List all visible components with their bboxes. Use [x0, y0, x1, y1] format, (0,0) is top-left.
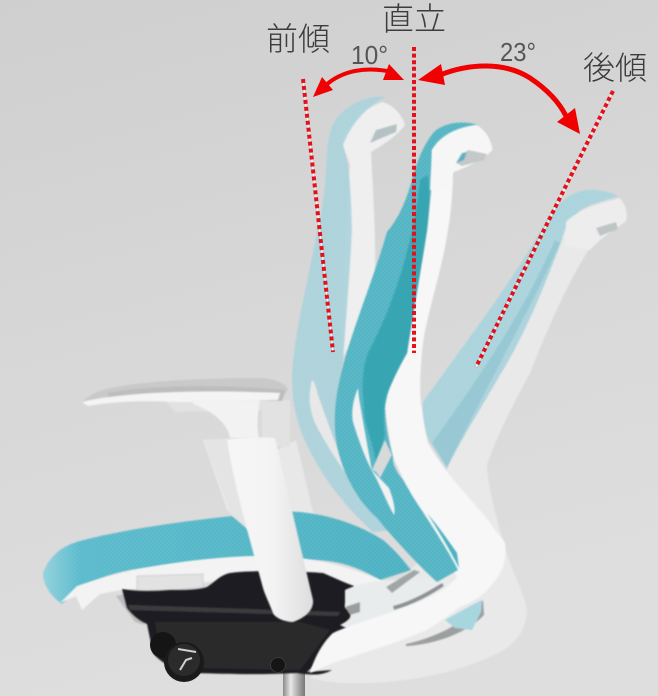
- armrest pad: [82, 378, 288, 406]
- rear cup grey arc: [406, 600, 484, 646]
- mechanism bolt: [270, 658, 286, 672]
- cross brace: [372, 440, 392, 478]
- upright mesh slit: [352, 388, 395, 515]
- reclined frame: [310, 198, 627, 683]
- forward frame: [341, 102, 405, 357]
- reclined dotted axis line: [476, 91, 613, 367]
- reclined backrest ghost: [310, 190, 627, 683]
- forward mesh: [292, 97, 395, 532]
- armrest neck: [193, 400, 260, 438]
- label: 23 degrees: 23°: [500, 37, 536, 67]
- label: recline: 後傾: [583, 50, 647, 86]
- forward head slot: [370, 124, 397, 143]
- upright head: [430, 125, 492, 190]
- armrest support rail: [165, 400, 290, 447]
- black tilt mechanism: [122, 571, 360, 675]
- upright dotted axis line: [412, 47, 416, 353]
- forward mesh slit: [310, 380, 345, 472]
- seat shell: [60, 556, 420, 625]
- reclined mesh: [423, 190, 618, 469]
- upright mesh: [335, 123, 478, 582]
- tension knob: [164, 642, 204, 682]
- teal edge slit inside shell: [427, 513, 459, 568]
- armrest tube back: [203, 438, 260, 540]
- metal gas cylinder: [283, 670, 305, 696]
- upright mesh inner band: [363, 175, 429, 470]
- upright lower structure: [340, 570, 465, 635]
- forward backrest ghost: [292, 97, 405, 532]
- tension knob small: [150, 632, 176, 658]
- label: upright: 直立: [382, 1, 446, 37]
- reclined head slot: [596, 222, 618, 236]
- reclined head: [565, 199, 627, 250]
- label: 10 degrees: 10°: [351, 40, 388, 70]
- label: forward tilt: 前傾: [266, 21, 330, 57]
- upright frame: [310, 125, 505, 673]
- arrow: recline 23 degrees: [418, 64, 580, 134]
- seat cushion: [43, 512, 411, 604]
- forward dotted axis line: [303, 79, 333, 352]
- armrest post background: [203, 440, 340, 530]
- armrest tube: [227, 437, 313, 622]
- arrow: forward 10 degrees: [313, 64, 404, 97]
